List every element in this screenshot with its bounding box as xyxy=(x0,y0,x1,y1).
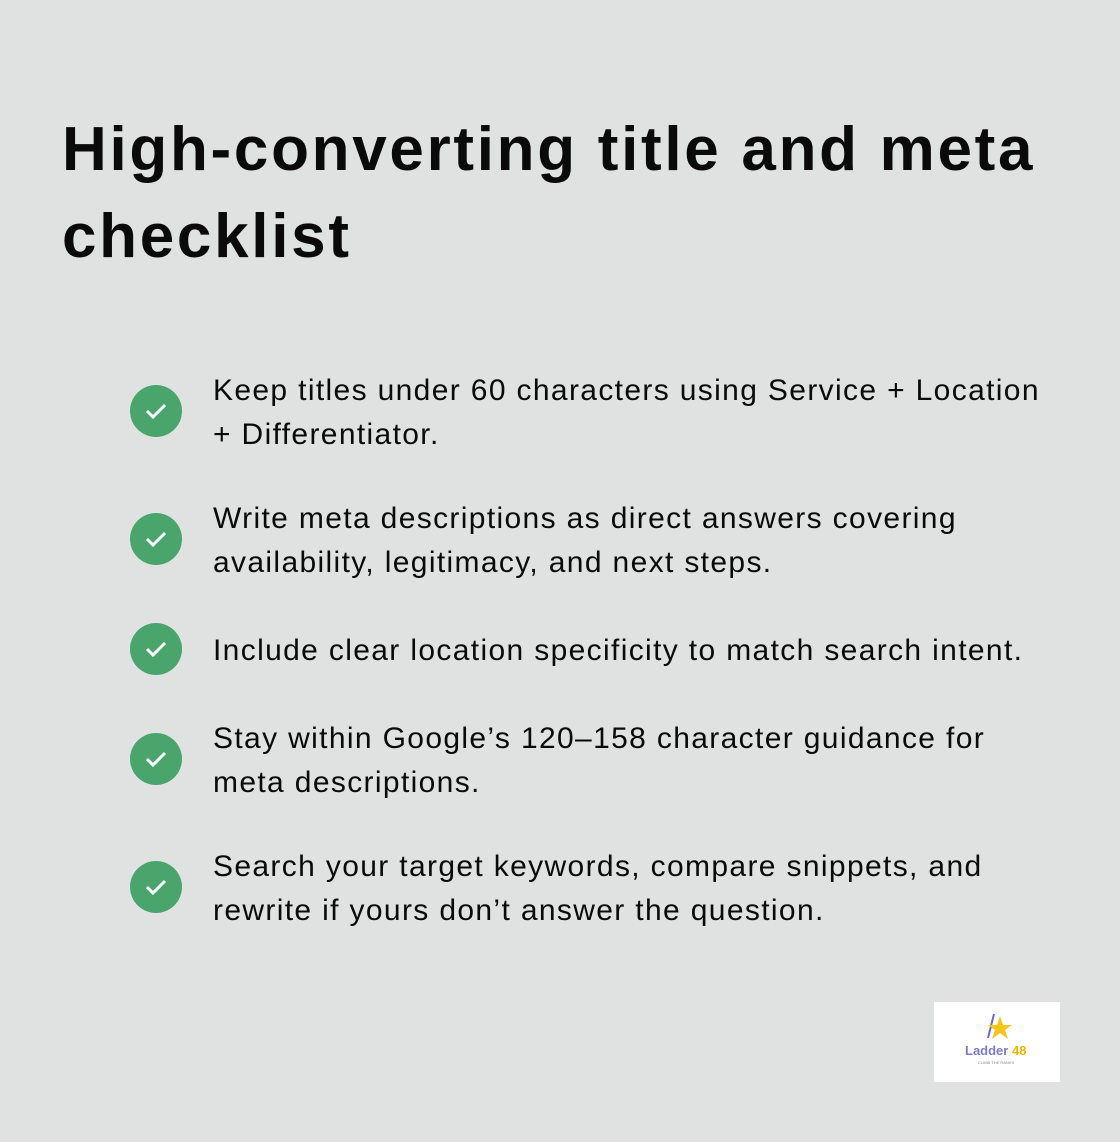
logo: CLIMB THE RANKS xyxy=(978,1060,1014,1065)
item 3 xyxy=(130,623,1023,675)
icon: check xyxy=(130,861,182,913)
item 4 xyxy=(130,722,985,799)
item 5 xyxy=(130,850,983,927)
icon: check xyxy=(130,513,182,565)
item 2 xyxy=(130,502,957,579)
icon: check xyxy=(130,385,182,437)
text 1: Keep titles under 60 characters using Service + Location + Differentiator. xyxy=(213,374,1040,451)
icon: check xyxy=(130,733,182,785)
icon: check xyxy=(130,623,182,675)
text 2: Write meta descriptions as direct answers covering availability, legitimacy, and next steps. xyxy=(213,502,957,579)
item 1 xyxy=(130,374,1040,451)
logo: Ladder 48 xyxy=(965,1043,1026,1058)
text 5: Search your target keywords, compare snippets, and rewrite if yours don’t answer the question. xyxy=(213,850,983,927)
logo xyxy=(934,1002,1060,1082)
text 4: Stay within Google’s 120–158 character guidance for meta descriptions. xyxy=(213,722,985,799)
text 3: Include clear location specificity to match search intent. xyxy=(213,634,1023,667)
title: High-converting title and meta checklist xyxy=(62,115,1035,271)
